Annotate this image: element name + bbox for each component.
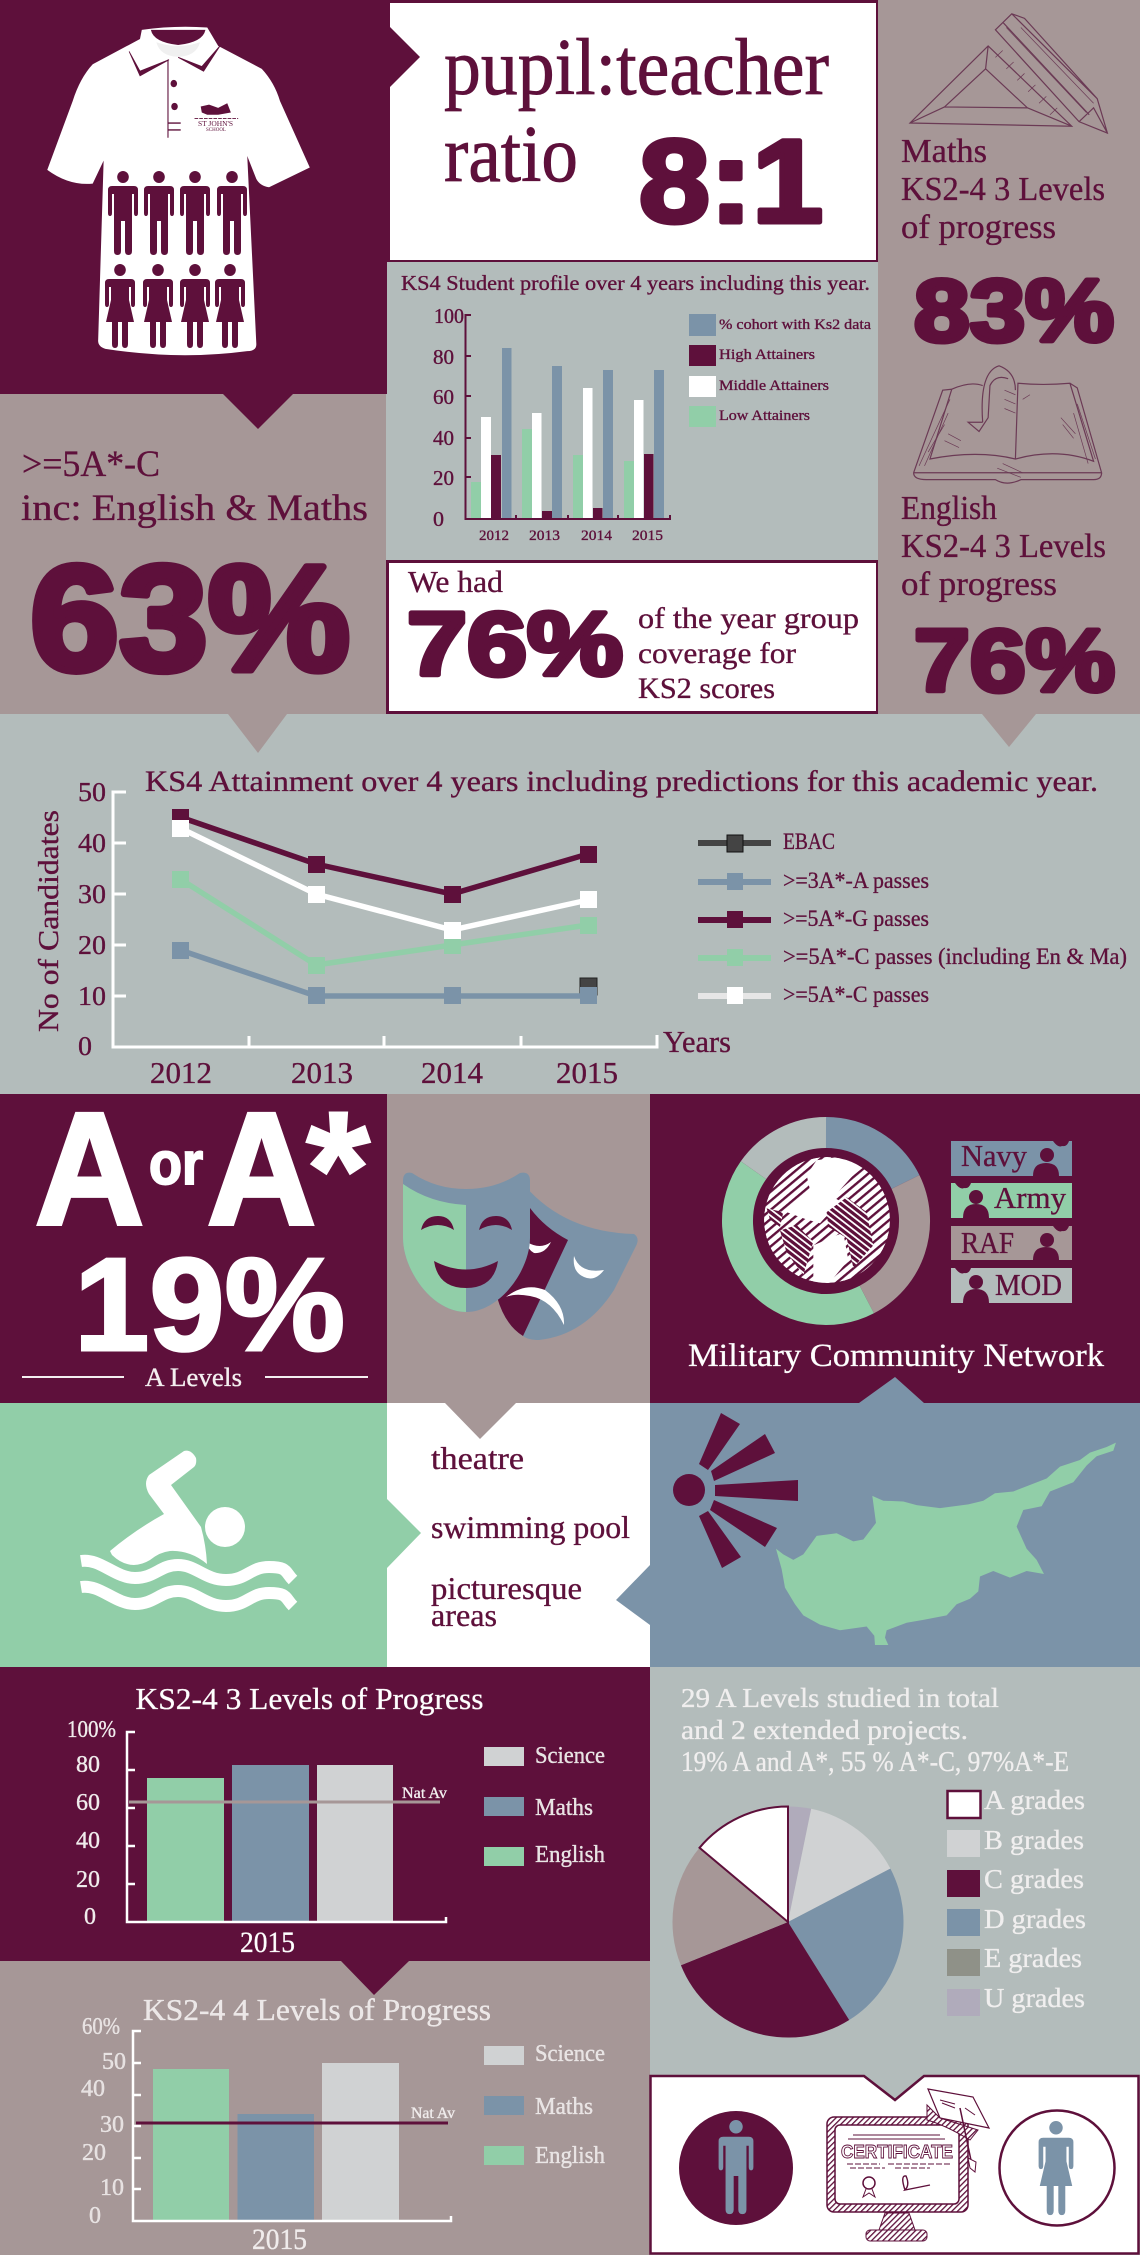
axis labels: 20	[76, 1867, 100, 1893]
y axis labels: 40	[433, 426, 454, 450]
we had label: We had	[408, 564, 504, 599]
bars	[153, 2063, 399, 2221]
map of Cyprus	[776, 1443, 1116, 1645]
legend: Middle Attainers	[719, 378, 829, 394]
legend: E grades	[984, 1943, 1082, 1973]
axes	[113, 792, 657, 1047]
logo text	[198, 119, 233, 133]
tag: army	[951, 1180, 1072, 1218]
axis labels: 60%	[82, 2014, 120, 2040]
panel: A level grades pie chart	[650, 1667, 1140, 2077]
icon: certificate on monitor with cap	[827, 2089, 989, 2241]
axis tick labels: 2012	[150, 1055, 212, 1090]
maths value: 83%	[914, 261, 1114, 360]
axis tick labels: 2014	[421, 1055, 484, 1090]
facilities text	[431, 1440, 630, 1633]
axis labels: 80	[76, 1752, 100, 1778]
icon: certificate on monitor with cap: CERTIFICATE	[841, 2142, 953, 2162]
legend: Science	[535, 2041, 605, 2067]
axis tick labels: Years	[663, 1024, 731, 1059]
coverage value: 76%	[407, 595, 623, 695]
icon: girl in circle	[1000, 2110, 1114, 2226]
icon: open book	[914, 366, 1102, 483]
icon: globe	[764, 1157, 890, 1286]
tag: mod	[951, 1267, 1072, 1303]
axis labels: 0	[84, 1904, 96, 1930]
stat value: 63%	[30, 534, 350, 702]
maths label: of progress	[901, 209, 1056, 246]
summary text: and 2 extended projects.	[681, 1715, 968, 1745]
axes	[127, 1732, 446, 1922]
bars	[471, 348, 664, 519]
panel: KS4 student profile bar chart	[387, 262, 878, 561]
y axis labels: 80	[433, 345, 454, 369]
panel: KS4 attainment line chart	[0, 714, 1140, 1094]
chart title: KS2-4 4 Levels of Progress	[143, 1992, 491, 2027]
y axis labels	[433, 304, 464, 531]
year labels: 2014	[581, 528, 613, 544]
ratio word: ratio	[444, 111, 578, 199]
year labels: 2015	[632, 528, 663, 544]
panel: 5A*-C stat	[0, 394, 386, 753]
grade heading: *	[306, 1077, 371, 1261]
axis tick labels: 50	[78, 777, 106, 807]
maths label: Maths	[901, 133, 987, 170]
english label: of progress	[901, 566, 1057, 603]
donut chart	[737, 1132, 915, 1309]
legend: >=5A*-C passes	[783, 982, 929, 1007]
panel: swimming pool	[0, 1403, 421, 1667]
tag: raf	[951, 1225, 1072, 1260]
axis labels: 40	[81, 2076, 105, 2102]
english label: English	[901, 490, 997, 527]
pupils: girls	[105, 264, 245, 348]
icon: boy in circle	[679, 2111, 793, 2225]
axis tick labels	[78, 777, 731, 1090]
legend	[689, 314, 871, 427]
panel: theatre masks	[387, 1094, 650, 1403]
icon: swimmer	[81, 1451, 293, 1606]
tag: navy: Navy	[961, 1138, 1027, 1173]
coverage description	[638, 602, 859, 705]
panel: certificates and pupils	[650, 2076, 1138, 2254]
a levels label: A Levels	[145, 1363, 242, 1392]
stat label: inc: English & Maths	[21, 488, 368, 529]
panel: A or A* 19 percent	[0, 1077, 387, 1403]
axes	[133, 2031, 451, 2221]
axis labels: 0	[89, 2203, 101, 2229]
tag: army: Army	[994, 1180, 1066, 1215]
y axis labels: 60	[433, 385, 454, 409]
summary text: 19% A and A*, 55 % A*-C, 97%A*-E	[681, 1746, 1069, 1778]
axis labels: 20	[82, 2140, 106, 2166]
chart title: KS2-4 3 Levels of Progress	[136, 1681, 484, 1716]
logo text: SCHOOL	[206, 128, 226, 133]
legend	[484, 2041, 605, 2169]
coverage description: KS2 scores	[638, 672, 775, 705]
english label	[901, 490, 1106, 603]
icon: sun	[673, 1413, 798, 1568]
facilities text: swimming pool	[431, 1509, 630, 1545]
legend: >=3A*-A passes	[783, 868, 929, 893]
axis labels	[67, 1717, 116, 1930]
legend: EBAC	[783, 829, 835, 854]
panel: school shirt with pupils	[0, 0, 420, 429]
panel: pupil teacher ratio	[388, 2, 878, 262]
summary text	[681, 1683, 1069, 1778]
maths label: KS2-4 3 Levels	[901, 171, 1105, 208]
logo text: ST JOHN'S	[198, 119, 233, 128]
legend	[947, 1785, 1086, 2016]
legend: English	[535, 2143, 605, 2169]
english value: 76%	[914, 611, 1115, 710]
legend	[698, 829, 1127, 1007]
arrow: taupe pointer into facilities	[445, 1403, 516, 1439]
network title: Military Community Network	[688, 1338, 1105, 1374]
axis tick labels: 0	[78, 1031, 92, 1061]
legend: D grades	[984, 1904, 1086, 1934]
panel: facilities list	[387, 1403, 650, 1667]
legend: % cohort with Ks2 data	[719, 317, 871, 333]
chart title: KS4 Attainment over 4 years including predictions for this academic year.	[145, 765, 1098, 798]
legend: Maths	[535, 2094, 593, 2120]
year labels	[479, 528, 663, 544]
legend: >=5A*-C passes (including En & Ma)	[783, 944, 1127, 969]
icon: set square and pencil	[910, 14, 1107, 133]
legend: Low Attainers	[719, 408, 810, 424]
y axis labels: 0	[433, 507, 444, 531]
panel: military community network	[650, 1094, 1140, 1403]
ratio heading: pupil:teacher	[444, 24, 829, 112]
stat label: >=5A*-C	[22, 444, 160, 485]
tag: raf: RAF	[961, 1225, 1014, 1260]
panel: KS2-4 3 levels of progress	[0, 1667, 650, 1995]
axis labels: 60	[76, 1790, 100, 1816]
year labels: 2012	[479, 528, 509, 544]
facilities text: areas	[431, 1597, 497, 1633]
facilities text: theatre	[431, 1440, 524, 1476]
legend	[484, 1743, 605, 1868]
legend: English	[535, 1842, 605, 1868]
y axis labels: 100	[434, 304, 464, 328]
panel: Cyprus map	[616, 1377, 1140, 1667]
axis labels: 30	[100, 2112, 124, 2138]
grade heading: A	[35, 1079, 144, 1258]
grade heading: A	[207, 1079, 316, 1258]
axis tick labels: 20	[78, 930, 106, 960]
tag: mod: MOD	[995, 1267, 1062, 1302]
axis labels: 40	[76, 1828, 100, 1854]
facilities text: picturesque	[431, 1570, 582, 1606]
axis tick labels: 30	[78, 879, 106, 909]
axis tick labels: 2013	[291, 1055, 353, 1090]
national average line: Nat Av	[402, 1785, 447, 1802]
legend: >=5A*-G passes	[783, 906, 929, 931]
english label: KS2-4 3 Levels	[901, 528, 1106, 565]
bars	[147, 1765, 393, 1922]
chart title: KS4 Student profile over 4 years including this year.	[401, 271, 870, 295]
legend: Maths	[535, 1795, 593, 1821]
legend: A grades	[984, 1785, 1085, 1815]
pupils: boys	[108, 171, 247, 255]
panel: 76 percent coverage	[388, 562, 878, 712]
maths label	[901, 133, 1105, 246]
icon: theatre masks	[403, 1173, 638, 1340]
y axis labels: 20	[433, 466, 454, 490]
axis labels: 100%	[67, 1717, 116, 1743]
year labels: 2013	[529, 528, 560, 544]
axis labels: 10	[100, 2175, 124, 2201]
summary text: 29 A Levels studied in total	[681, 1683, 999, 1713]
grade heading: or	[149, 1130, 203, 1197]
panel: KS2-4 4 levels of progress	[0, 1961, 650, 2255]
legend: B grades	[984, 1825, 1084, 1855]
stat label	[21, 444, 368, 529]
axis labels: 50	[102, 2049, 126, 2075]
axis tick labels: 40	[78, 828, 106, 858]
legend: U grades	[984, 1983, 1085, 2013]
legend: High Attainers	[719, 347, 815, 363]
coverage description: coverage for	[638, 637, 796, 670]
axis labels	[81, 2014, 126, 2229]
grade heading	[35, 1077, 371, 1261]
icon: polo shirt	[47, 27, 310, 355]
tag: navy	[951, 1138, 1072, 1176]
y axis label: No of Candidates	[34, 810, 65, 1032]
coverage description: of the year group	[638, 602, 859, 635]
axis tick labels: 10	[78, 981, 106, 1011]
19 percent value: 19%	[74, 1231, 345, 1378]
axis tick labels: 2015	[556, 1055, 618, 1090]
ratio value: 8:1	[639, 116, 823, 248]
legend: C grades	[984, 1864, 1084, 1894]
panel: maths and english progress	[878, 0, 1140, 747]
series lines	[172, 809, 597, 1004]
national average line: Nat Av	[411, 2105, 455, 2122]
axes	[465, 315, 670, 519]
pie chart	[672, 1806, 904, 2038]
legend: Science	[535, 1743, 605, 1769]
year label: 2015	[240, 1926, 295, 1959]
